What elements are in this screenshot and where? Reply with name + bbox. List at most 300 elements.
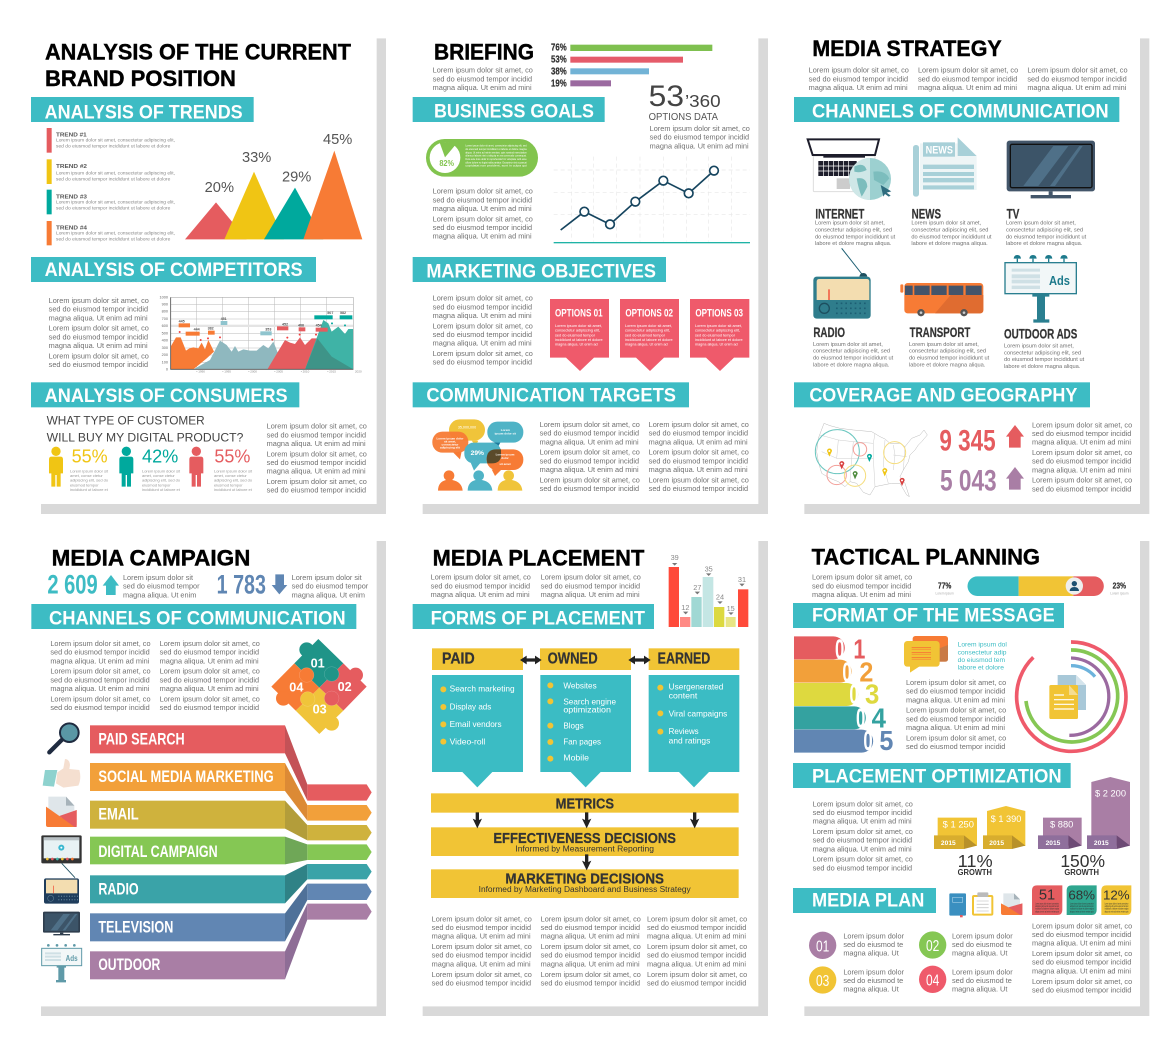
numbered item 02: Lorem ipsum dolor bbox=[952, 931, 1013, 940]
option card 02: OPTIONS 02 bbox=[625, 307, 673, 319]
text block: sed do eiusmod tempor incidid bbox=[1032, 484, 1131, 493]
text block: Lorem ipsum dolor sit amet, co bbox=[433, 187, 533, 196]
text block: Lorem ipsum dolor sit amet, co bbox=[813, 855, 913, 864]
stat card: 51: aliqua ut enim ad minim veniam quis bbox=[1035, 910, 1059, 913]
label: outdoor ads: do eiusmod tempor incididunt ut bbox=[1004, 357, 1085, 363]
text block: magna aliqua. Ut enim ad mini bbox=[267, 467, 366, 476]
text block: sed do eiusmod tempor incidid bbox=[433, 302, 532, 311]
numbered stack 01 to 05: 0 bbox=[842, 657, 852, 688]
text block: Lorem ipsum dolor sit amet, co bbox=[540, 420, 640, 429]
column: paid: Video-roll bbox=[450, 737, 485, 747]
numbered stack 01 to 05: 0 bbox=[849, 678, 859, 709]
heading banner: format of the message: FORMAT OF THE MESSAGE bbox=[812, 606, 1055, 627]
text columns bbox=[809, 66, 1128, 92]
column: paid bbox=[432, 648, 523, 787]
option card 01: incididunt ut labore et dolore bbox=[555, 338, 603, 342]
metrics bar bbox=[431, 793, 739, 813]
trend list: TREND #3 bbox=[56, 194, 87, 200]
text block: sed do eiusmod tempor incidid bbox=[647, 951, 746, 960]
stat card: 68%: Lorem ipsum dolor sit amet consectetur bbox=[1070, 902, 1094, 905]
bar chart: 19% bbox=[551, 79, 567, 90]
yellow growth bars: 2015 bbox=[989, 840, 1004, 847]
text columns: Lorem ipsum dolor sit amet, co bbox=[918, 66, 1018, 75]
progress bar 77% / 23% bbox=[936, 576, 1129, 596]
text block: magna aliqua. Ut enim ad mini bbox=[1032, 438, 1131, 447]
text columns: magna aliqua. Ut enim ad mini bbox=[1027, 83, 1127, 92]
speech bubbles and people: sit amet bbox=[499, 462, 511, 466]
area chart: 200 bbox=[162, 353, 168, 357]
text block: magna aliqua. Ut enim ad mini bbox=[433, 83, 532, 92]
text block: Lorem ipsum dolor sit amet, co bbox=[49, 351, 149, 360]
text block: Lorem ipsum dolor sit amet, co bbox=[433, 66, 533, 75]
purple growth bars: 2015 bbox=[1046, 840, 1061, 847]
text block: sed do eiusmod tempor incidid bbox=[49, 360, 148, 369]
icon: television bbox=[1007, 141, 1095, 198]
text block: Lorem ipsum dolor sit amet, co bbox=[1032, 949, 1132, 958]
label: outdoor ads: Lorem ipsum dolor sit amet, bbox=[1004, 343, 1074, 349]
stat: options data bbox=[649, 80, 721, 123]
text block: Lorem ipsum dolor sit bbox=[123, 573, 193, 582]
text block: magna aliqua. Ut enim ad mini bbox=[812, 590, 911, 599]
stat card: 68%: aliqua ut enim ad minim veniam quis bbox=[1070, 910, 1094, 913]
bar chart bbox=[669, 553, 748, 627]
text block: sed do eiusmod tempor incidid bbox=[541, 923, 640, 932]
text block: sed do eiusmod tempor incidid bbox=[812, 581, 911, 590]
purple growth bars bbox=[1038, 777, 1130, 877]
text block: magna aliqua. Ut enim ad mini bbox=[540, 437, 639, 446]
consumer stat: yellow person 55%: adipiscing elit, sed do bbox=[70, 478, 109, 483]
consumer stat: teal person 42%: incididunt ut labore et bbox=[142, 487, 181, 492]
stat card: 12%: adipiscing elit sed do eiusmod tempor bbox=[1105, 905, 1128, 908]
icon: radio bbox=[813, 248, 871, 319]
text block: sed do eiusmod tempor incidid bbox=[649, 456, 748, 465]
text block: Lorem ipsum dolor sit amet, co bbox=[433, 349, 533, 358]
heading banner: forms of placement: FORMS OF PLACEMENT bbox=[431, 608, 645, 629]
text block: sed do eiusmod tempor incidid bbox=[267, 486, 366, 495]
label: transport bbox=[909, 324, 990, 368]
text block: Lorem ipsum dolor sit amet, co bbox=[1032, 448, 1132, 457]
ribbon: television: TELEVISION bbox=[98, 917, 173, 936]
stat card: 51 bbox=[1032, 885, 1062, 915]
speech bubbles and people: Lorem ipsum bbox=[496, 453, 515, 457]
option card 01: OPTIONS 01 bbox=[555, 307, 603, 319]
area chart: 452 bbox=[282, 322, 288, 326]
area chart: 2020 bbox=[355, 370, 362, 374]
question heading bbox=[47, 414, 243, 444]
bar chart: 39 bbox=[671, 553, 679, 562]
text block: Lorem ipsum dolor sit bbox=[292, 573, 362, 582]
green pill callout 82% bbox=[426, 139, 538, 177]
ribbon: outdoor: OUTDOOR bbox=[98, 955, 160, 974]
text block: magna aliqua. Ut enim ad mini bbox=[540, 465, 639, 474]
panel: analysis of the current brand position bbox=[31, 38, 386, 514]
text block: magna aliqua. Ut enim ad mini bbox=[49, 313, 148, 322]
puzzle diagram: 03 bbox=[313, 703, 327, 717]
heading banner: analysis of trends: ANALYSIS OF TRENDS bbox=[45, 102, 243, 123]
heading banner: business goals: BUSINESS GOALS bbox=[434, 101, 594, 122]
text block: sed do eiusmod tempor incidid bbox=[49, 305, 148, 314]
numbered item 04: Lorem ipsum dolor bbox=[952, 967, 1013, 976]
icon: clipboard bbox=[972, 892, 993, 916]
bar chart: 38% bbox=[551, 67, 567, 78]
text block: magna aliqua. Ut enim ad mini bbox=[541, 959, 640, 968]
bar chart: 53% bbox=[551, 55, 567, 66]
trend list: Lorem ipsum dolor sit amet, consectetur adipiscing elit, bbox=[56, 170, 175, 175]
numbered item 01: sed do eiusmod te bbox=[843, 940, 903, 949]
consumer stat: teal person 42%: Lorem ipsum dolor sit bbox=[142, 468, 181, 473]
trend list: sed do eiusmod tempor incididunt ut labore et dolore bbox=[56, 144, 171, 149]
double arrow: owned to earned bbox=[628, 656, 651, 664]
text block: sed do eiusmod tempor incidid bbox=[432, 979, 531, 988]
text block: Lorem ipsum dolor sit amet, co bbox=[160, 694, 260, 703]
area chart: 445 bbox=[179, 319, 185, 323]
trend list: sed do eiusmod tempor incididunt ut labore et dolore bbox=[56, 206, 171, 211]
speech bubbles and people: 35,000,000 bbox=[458, 425, 476, 429]
text block: Lorem ipsum dolor sit amet, co bbox=[1032, 420, 1132, 429]
title: MEDIA STRATEGY bbox=[812, 36, 1002, 61]
text block: Lorem ipsum dolor sit amet, co bbox=[906, 678, 1006, 687]
text block: Lorem ipsum dolor sit amet, co bbox=[540, 448, 640, 457]
text block: Lorem ipsum dolor sit amet, co bbox=[813, 799, 913, 808]
text block: Lorem ipsum dolor sit amet, co bbox=[650, 124, 750, 133]
label: tv bbox=[1006, 205, 1087, 247]
icon: small billboard: Ads bbox=[66, 954, 78, 963]
option card 02: sed do eiusmod tempor bbox=[625, 333, 666, 337]
option card 03: OPTIONS 03 bbox=[695, 307, 743, 319]
label: outdoor ads bbox=[1004, 326, 1085, 370]
numbered stack 01 to 05: 2 bbox=[859, 657, 873, 688]
text block: Lorem ipsum dolor sit amet, co bbox=[649, 420, 749, 429]
option card 02: magna aliqua. Ut enim ad bbox=[625, 343, 668, 347]
consumer stat: yellow person 55%: Lorem ipsum dolor sit bbox=[70, 468, 109, 473]
icon: small radio bbox=[44, 863, 79, 904]
label: internet bbox=[815, 205, 896, 247]
title: BRIEFING bbox=[434, 39, 534, 64]
text block: Lorem ipsum dolor sit amet, co bbox=[50, 694, 151, 703]
text block: Lorem ipsum dolor sit amet, co bbox=[433, 294, 533, 303]
text block: magna aliqua. Ut enim ad mini bbox=[541, 932, 640, 941]
numbered item 04: 04 bbox=[926, 972, 939, 989]
text block: magna aliqua. Ut enim bbox=[123, 590, 196, 599]
icon: book bbox=[949, 893, 966, 917]
text block: Lorem ipsum dolor sit amet, co bbox=[541, 970, 641, 979]
option card 01: magna aliqua. Ut enim ad bbox=[555, 343, 598, 347]
heading banner: media plan: MEDIA PLAN bbox=[812, 891, 924, 912]
area chart: 353 bbox=[265, 328, 271, 332]
trend list bbox=[47, 128, 175, 245]
text block: sed do eiusmod tempor incidid bbox=[541, 951, 640, 960]
numbered item 01: Lorem ipsum dolor bbox=[843, 931, 905, 940]
text block: Lorem ipsum dolor sit amet, co bbox=[267, 422, 367, 431]
numbered stack 01 to 05: 5 bbox=[879, 725, 893, 756]
consumer stat: red person 55%: 55% bbox=[214, 446, 250, 467]
icon: tablet bbox=[41, 835, 82, 863]
label: outdoor ads: labore et dolore magna aliqua. bbox=[1004, 364, 1081, 370]
trend list: TREND #1 bbox=[56, 133, 87, 139]
area chart: • 2015 bbox=[327, 370, 336, 374]
area chart: 582 bbox=[340, 311, 346, 315]
text block: magna aliqua. Ut enim ad mini bbox=[813, 817, 912, 826]
purple growth bars: 150% bbox=[1060, 851, 1105, 871]
numbered item 01: magna aliqua. Ut bbox=[843, 949, 899, 958]
purple growth bars: 2015 bbox=[1094, 840, 1109, 847]
text block: magna aliqua. Ut enim ad mini bbox=[160, 684, 259, 693]
text block: sed do eiusmod tempor incidid bbox=[813, 808, 912, 817]
numbered item 02: sed do eiusmod te bbox=[952, 940, 1012, 949]
bar chart: 15 bbox=[727, 604, 735, 613]
label: news: consectetur adipiscing elit, sed bbox=[911, 227, 988, 233]
option card 02: consectetur adipiscing elit, bbox=[625, 329, 670, 333]
title: MEDIA CAMPAIGN bbox=[52, 546, 250, 571]
green pill callout 82%: cillum dolore eu fugiat nulla pariatur. Excepteur sint occaecat bbox=[465, 161, 527, 164]
column: earned: content bbox=[669, 691, 698, 701]
label: news bbox=[911, 205, 992, 247]
text block: Lorem ipsum dolor sit amet, co bbox=[647, 970, 747, 979]
option card 01: Lorem ipsum dolor sit amet, bbox=[555, 324, 602, 328]
progress bar 77% / 23%: 77% bbox=[938, 582, 951, 591]
numbered item 04: sed do eiusmod te bbox=[952, 976, 1012, 985]
text columns: sed do eiusmod tempor incidid bbox=[809, 74, 908, 83]
icon: bus bbox=[900, 283, 983, 316]
panel: media strategy bbox=[794, 36, 1149, 514]
text block: sed do eiusmod tempor incidid bbox=[432, 951, 531, 960]
text block: magna aliqua. Ut enim ad mini bbox=[50, 656, 150, 665]
text block: sed do eiusmod tempor incidid bbox=[813, 836, 912, 845]
text block: Lorem ipsum dolor sit amet, co bbox=[541, 942, 641, 951]
green pill callout 82%: aliqua. Ut enim ad minim veniam, quis nostrud exercitation bbox=[465, 151, 527, 154]
text columns: Lorem ipsum dolor sit amet, co bbox=[809, 66, 909, 75]
text block: magna aliqua. Ut enim ad mini bbox=[50, 684, 150, 693]
title: MEDIA PLACEMENT bbox=[433, 546, 645, 571]
text columns: magna aliqua. Ut enim ad mini bbox=[918, 83, 1017, 92]
consumer stat: teal person 42% bbox=[119, 446, 181, 492]
text block: magna aliqua. Ut enim ad mini bbox=[647, 959, 746, 968]
option card 03: incididunt ut labore et dolore bbox=[695, 338, 743, 342]
option card 03: sed do eiusmod tempor bbox=[695, 333, 736, 337]
trend list: sed do eiusmod tempor incididunt ut labore et dolore bbox=[56, 176, 171, 181]
column: paid: PAID bbox=[442, 651, 475, 668]
label: news: do eiusmod tempor incididunt ut bbox=[911, 234, 992, 240]
text columns: sed do eiusmod tempor incidid bbox=[541, 581, 640, 590]
area chart: • 2010 bbox=[301, 370, 310, 374]
double arrow: paid to owned bbox=[520, 656, 542, 664]
text block: magna aliqua. Ut enim ad mini bbox=[432, 959, 531, 968]
area chart: 1000 bbox=[159, 295, 168, 299]
text block: Lorem ipsum dolor sit amet, co bbox=[813, 827, 913, 836]
effectiveness decisions bar: Informed by Measurement Reporting bbox=[515, 845, 654, 854]
speech bubbles and people: adipiscing elit bbox=[440, 446, 460, 450]
area chart: 600 bbox=[162, 324, 168, 328]
stat: 9 345 with up arrow: 9 345 bbox=[939, 424, 996, 457]
column: owned: Mobile bbox=[563, 753, 589, 763]
label: news: Lorem ipsum dolor sit amet, bbox=[911, 221, 982, 227]
ribbon: email bbox=[90, 801, 372, 840]
consumer stat: red person 55%: adipiscing elit, sed do bbox=[214, 478, 253, 483]
column: earned bbox=[649, 648, 739, 787]
text block: sed do eiusmod tempor incidid bbox=[1032, 429, 1131, 438]
text block: Lorem ipsum dolor sit amet, co bbox=[160, 667, 260, 676]
progress bar 77% / 23%: Lorem ipsum bbox=[936, 591, 954, 595]
panel: tactical planning bbox=[793, 541, 1149, 1016]
text block: magna aliqua. Ut enim ad mini bbox=[649, 437, 748, 446]
text columns: sed do eiusmod tempor incidid bbox=[918, 74, 1017, 83]
text block: sed do eiusmod tempor incidid bbox=[540, 484, 639, 493]
label: tv: consectetur adipiscing elit, sed bbox=[1006, 227, 1083, 233]
text block: sed do eiusmod tempor incidid bbox=[1032, 457, 1131, 466]
text block: sed do eiusmod tempor incidid bbox=[906, 687, 1005, 696]
text columns bbox=[431, 573, 641, 599]
icon: magnifier bbox=[49, 723, 79, 752]
question heading: WHAT TYPE OF CUSTOMER bbox=[47, 414, 205, 428]
bar chart: 12 bbox=[681, 603, 689, 612]
text columns: magna aliqua. Ut enim ad mini bbox=[809, 83, 908, 92]
text block: Lorem ipsum dolor sit amet, co bbox=[647, 942, 747, 951]
option card 02: Lorem ipsum dolor sit amet, bbox=[625, 324, 672, 328]
label: news: NEWS bbox=[912, 205, 941, 221]
consumer stat: yellow person 55%: amet, conse ctetur bbox=[70, 473, 103, 478]
numbered item 02: 02 bbox=[926, 938, 939, 955]
green pill callout 82%: ullamco laboris nisi ut aliquip ex ea commodo consequat. bbox=[465, 155, 527, 158]
column: owned bbox=[540, 648, 631, 787]
speech bubbles and people: dolor bbox=[501, 456, 510, 460]
text columns: magna aliqua. Ut enim ad mini bbox=[431, 590, 530, 599]
text block: sed do eiusmod tempor incidid bbox=[433, 358, 532, 367]
column: owned: optimization bbox=[563, 705, 611, 715]
text block: Lorem ipsum dolor sit amet, co bbox=[540, 475, 640, 484]
option card 01: consectetur adipiscing elit, bbox=[555, 329, 600, 333]
yellow growth bars: GROWTH bbox=[958, 868, 992, 877]
numbered item 01: 01 bbox=[816, 938, 829, 955]
numbered item 01 bbox=[809, 931, 905, 959]
text block: magna aliqua. Ut enim ad mini bbox=[650, 141, 749, 150]
trend list: TREND #2 bbox=[56, 164, 87, 170]
text block: sed do eiusmod tempor incidid bbox=[433, 74, 532, 83]
column: owned: Blogs bbox=[563, 721, 584, 731]
text block: Lorem ipsum dolor sit amet, co bbox=[50, 667, 151, 676]
text block: sed do eiusmod tempor incidid bbox=[160, 675, 259, 684]
metrics bar: METRICS bbox=[556, 796, 614, 812]
text block: Lorem ipsum dolor sit amet, co bbox=[812, 573, 912, 582]
text block: sed do eiusmod tempor incidid bbox=[1032, 930, 1131, 939]
icon: newspaper bbox=[913, 137, 977, 197]
area chart: 454 bbox=[316, 323, 323, 327]
label: transport: do eiusmod tempor incididunt ut bbox=[909, 356, 990, 362]
triangle chart: 45% bbox=[323, 132, 352, 148]
trend list: TREND #4 bbox=[56, 225, 88, 231]
option card 02 bbox=[620, 299, 679, 371]
stat card: 51: 51 bbox=[1039, 888, 1055, 904]
text block: sed do eiusmod tempor incidid bbox=[433, 330, 532, 339]
heading banner: analysis of consumers: ANALYSIS OF CONSUMERS bbox=[45, 386, 288, 407]
text block: magna aliqua. Ut enim ad mini bbox=[433, 232, 532, 241]
text block: sed do eiusmod tempor incidid bbox=[160, 648, 259, 657]
bar chart: 24 bbox=[716, 593, 724, 602]
stat card: 12%: Lorem ipsum dolor sit amet consectetur bbox=[1105, 902, 1128, 905]
text columns: Lorem ipsum dolor sit amet, co bbox=[1027, 66, 1128, 75]
consumer stat: teal person 42%: 42% bbox=[142, 446, 178, 467]
area chart: 400 bbox=[162, 339, 168, 343]
numbered stack 01 to 05: 1 bbox=[853, 633, 865, 664]
icon: envelope bbox=[1001, 893, 1022, 915]
heading banner: channels of communication: CHANNELS OF COMMUNICATION bbox=[49, 608, 346, 629]
area chart: 300 bbox=[162, 346, 168, 350]
bar chart bbox=[551, 43, 712, 90]
triangle chart: 20% bbox=[205, 180, 234, 196]
yellow growth bars: 11% bbox=[958, 851, 993, 871]
text block: Lorem ipsum dolor sit amet, co bbox=[49, 296, 149, 305]
option card 03: consectetur adipiscing elit, bbox=[695, 329, 740, 333]
speech bubbles and people: 29% bbox=[471, 450, 484, 457]
ribbon: outdoor bbox=[90, 904, 372, 979]
effectiveness decisions bar bbox=[431, 827, 739, 856]
stat card: 51: Lorem ipsum dolor sit amet consectetur bbox=[1035, 902, 1059, 905]
stat: options data: OPTIONS DATA bbox=[649, 112, 718, 123]
icon: speech bubbles bbox=[904, 636, 948, 673]
consumer stat: yellow person 55%: incididunt ut labore et bbox=[70, 487, 109, 492]
text block: sed do eiusmod tempor incidid bbox=[160, 703, 259, 712]
text columns: magna aliqua. Ut enim ad mini bbox=[541, 590, 640, 599]
trend list: Lorem ipsum dolor sit amet, consectetur adipiscing elit, bbox=[56, 231, 175, 236]
consumer stat: red person 55%: amet, conse ctetur bbox=[214, 473, 247, 478]
flow arrows bbox=[473, 812, 699, 870]
label: radio: consectetur adipiscing elit, sed bbox=[813, 349, 890, 355]
trend list: Lorem ipsum dolor sit amet, consectetur adipiscing elit, bbox=[56, 200, 175, 205]
numbered item 02: magna aliqua. Ut bbox=[952, 949, 1007, 958]
text block: Lorem ipsum dolor sit amet, co bbox=[1032, 476, 1132, 485]
text block: sed do eiusmod tempor incidid bbox=[433, 223, 532, 232]
title: TACTICAL PLANNING bbox=[812, 544, 1040, 569]
icon: billboard bbox=[1005, 255, 1076, 323]
numbered stack 01 to 05 bbox=[794, 633, 893, 756]
purple growth bars: GROWTH bbox=[1064, 868, 1099, 877]
label: internet: Lorem ipsum dolor sit amet, bbox=[815, 221, 885, 227]
numbered stack 01 to 05: 0 bbox=[835, 633, 844, 664]
label: outdoor ads: OUTDOOR ADS bbox=[1004, 326, 1077, 342]
column: owned: Fan pages bbox=[563, 737, 602, 747]
speech bubbles and people: sit amet, bbox=[444, 440, 456, 444]
speech bubbles and people: ipsum dolor sit bbox=[495, 431, 516, 435]
consumer stat: teal person 42%: amet, conse ctetur bbox=[142, 473, 175, 478]
text block: Lorem ipsum dolor sit amet, co bbox=[267, 449, 367, 458]
text block: Lorem ipsum dolor sit amet, co bbox=[432, 914, 532, 923]
bar chart: 31 bbox=[738, 575, 746, 584]
yellow growth bars: $ 1 250 bbox=[943, 820, 974, 830]
speech bubbles and people: Lorem bbox=[501, 428, 510, 432]
stat: options data: ’360 bbox=[685, 91, 721, 111]
numbered stack 01 to 05: 0 bbox=[856, 703, 865, 734]
triangle chart: 29% bbox=[282, 169, 311, 185]
green pill callout 82%: do eiusmod tempor incididunt ut labore et dolore magna bbox=[465, 148, 527, 151]
text block: Lorem ipsum dolor sit amet, co bbox=[49, 324, 149, 333]
area chart: 900 bbox=[162, 303, 168, 307]
label: internet: do eiusmod tempor incididunt ut bbox=[815, 234, 896, 240]
bar chart: 27 bbox=[693, 583, 701, 592]
text block: sed do eiusmod tempor incidid bbox=[906, 742, 1005, 751]
stat: options data: 53 bbox=[649, 80, 684, 113]
text block: magna aliqua. Ut enim ad mini bbox=[649, 465, 748, 474]
purple growth bars: $ 2 200 bbox=[1095, 789, 1126, 799]
text block: sed do eiusmod tempor incidid bbox=[50, 648, 150, 657]
ribbon: digital campaign bbox=[90, 837, 372, 864]
text block: Lorem ipsum dolor sit amet, co bbox=[541, 914, 641, 923]
stat card: 12% bbox=[1101, 885, 1131, 915]
text block: magna aliqua. Ut enim ad mini bbox=[647, 932, 746, 941]
puzzle diagram: 04 bbox=[289, 681, 303, 695]
column: owned: Search engine bbox=[563, 696, 616, 706]
consumer stat: teal person 42%: adipiscing elit, sed do bbox=[142, 478, 181, 483]
numbered item 03: sed do eiusmod te bbox=[843, 976, 903, 985]
heading banner: marketing objectives: MARKETING OBJECTIVES bbox=[426, 261, 656, 282]
